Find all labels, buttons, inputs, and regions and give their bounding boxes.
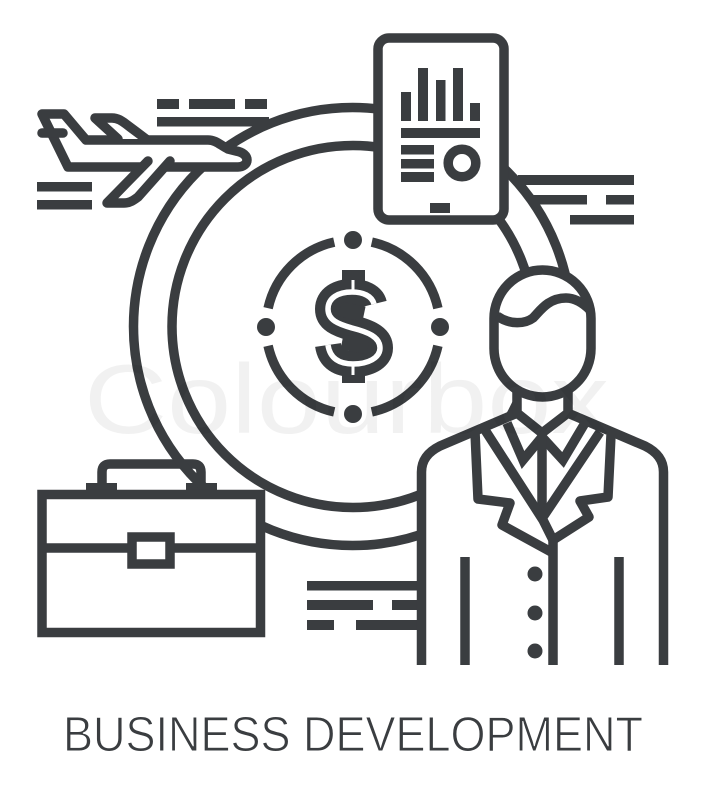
home button [430,203,450,213]
left pocket line [460,557,470,665]
icon: briefcase body [42,494,260,632]
four dots [257,231,449,423]
tie [537,437,547,517]
icon: businessman [421,270,664,665]
shirt collar [507,423,585,460]
text rows [401,145,434,182]
neck [517,388,568,433]
speed lines: below plane tail [37,182,92,210]
icon: briefcase handle [86,464,217,491]
donut chart [448,149,476,177]
right lapel [553,435,611,540]
hair [497,298,590,323]
text lines: right of tablet [518,175,634,224]
jacket [421,413,663,665]
dollar sign [328,270,380,383]
inner lapel lines [485,430,600,540]
right pocket line [614,557,624,665]
bar chart [401,68,480,138]
head [494,270,591,397]
title: BUSINESS DEVELOPMENT [63,708,643,762]
icon: dollar target [257,231,449,423]
front line [548,540,558,665]
shoulders outline [422,414,664,665]
icon: airplane [42,114,247,203]
left lapel [475,432,553,553]
buttons [528,566,542,658]
dashed circle arcs [268,242,438,412]
text lines: below rings [307,581,419,630]
icon: tablet with report [378,38,504,220]
speed lines: above plane [157,99,269,126]
watermark: Colourbox [84,344,609,454]
concentric rings [134,108,572,546]
tablet body [378,38,504,220]
